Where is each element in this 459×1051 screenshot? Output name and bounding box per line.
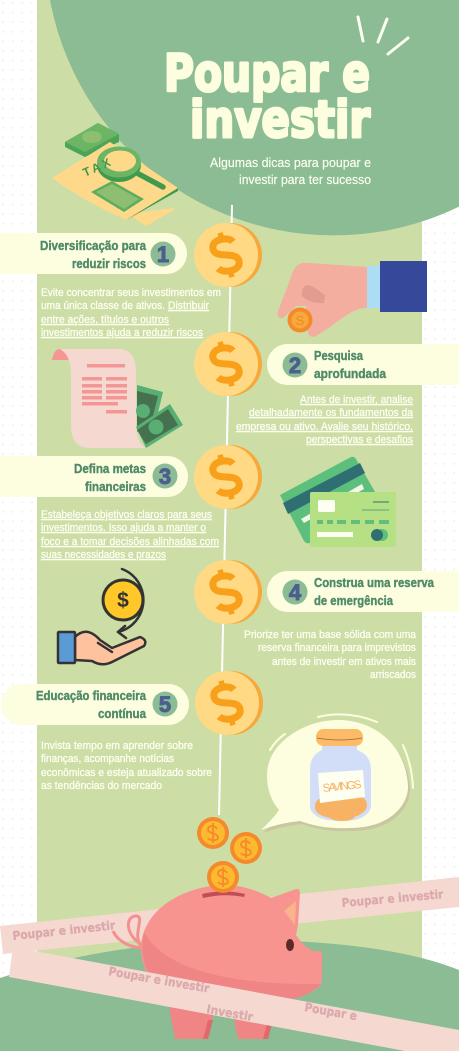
heading 2 xyxy=(314,348,387,381)
text 1: Distribuir xyxy=(168,300,209,312)
text 4: arriscados xyxy=(370,669,416,681)
text 2: perspectivas e desafios xyxy=(306,434,413,446)
number 2 xyxy=(282,352,308,378)
text 4: antes de investir em ativos mais xyxy=(272,656,416,668)
heading 3: financeiras xyxy=(85,479,146,494)
number 1: 1 xyxy=(157,242,169,267)
speech bubble with savings jar: SAVINGS xyxy=(322,779,362,795)
pill 3 xyxy=(0,456,188,497)
number 1 xyxy=(150,242,176,267)
pill 4 xyxy=(267,571,459,612)
step 2 xyxy=(194,332,459,446)
text 2 xyxy=(236,394,414,446)
coin 2 xyxy=(194,332,262,396)
subtitle xyxy=(210,156,371,187)
icon: hand receiving coin: $ xyxy=(117,589,129,612)
text 4: Priorize ter uma base sólida com uma xyxy=(244,629,417,641)
subtitle: investir para ter sucesso xyxy=(239,173,371,187)
number 5 xyxy=(152,692,178,717)
icon: hand receiving coin xyxy=(58,569,145,664)
green central panel xyxy=(37,0,422,1000)
text 1: entre ações, títulos e outros xyxy=(41,314,169,326)
icon: tax document with magnifier xyxy=(52,123,178,226)
coin 1 xyxy=(194,223,262,287)
coin 3 xyxy=(194,445,262,509)
step 4 xyxy=(194,560,459,681)
icon: credit cards xyxy=(280,457,396,547)
heading 2: Pesquisa xyxy=(314,348,364,363)
heading 4 xyxy=(314,575,435,608)
sparkle strokes xyxy=(358,17,408,54)
text 5: finanças, acompanhe notícias xyxy=(41,753,174,765)
text 4 xyxy=(244,629,417,681)
timeline line xyxy=(219,205,232,815)
heading 5: Educação financeira xyxy=(36,688,147,703)
icon: receipt scroll and money xyxy=(52,349,183,448)
number 5: 5 xyxy=(159,692,171,717)
heading 2: aprofundada xyxy=(314,366,387,381)
number 3 xyxy=(152,464,178,489)
number 3: 3 xyxy=(159,464,171,489)
subtitle: Algumas dicas para poupar e xyxy=(210,156,371,170)
title: Poupar e xyxy=(164,45,370,104)
coin 5 xyxy=(195,671,263,735)
icon: tax document with magnifier: TAX xyxy=(81,155,113,180)
coin entering piggy bank xyxy=(207,861,239,893)
icon: hand holding coin xyxy=(278,261,427,337)
heading 4: Construa uma reserva xyxy=(314,575,435,590)
ribbon: bottom xyxy=(9,947,459,1051)
text 5: econômicas e esteja atualizado sobre xyxy=(41,767,212,779)
step 5 xyxy=(1,671,263,792)
ribbon text: bottom 2: Investir xyxy=(205,1002,254,1024)
text 3 xyxy=(41,509,219,561)
number 2: 2 xyxy=(289,353,301,378)
text 5: as tendências do mercado xyxy=(41,780,162,792)
text 1 xyxy=(41,287,221,339)
heading 3 xyxy=(74,461,146,494)
header circle xyxy=(45,0,459,235)
ribbon: top xyxy=(0,877,459,954)
pill 5 xyxy=(1,684,189,725)
text 3: investimentos. Isso ajuda a manter o xyxy=(41,522,206,534)
pill 1 xyxy=(0,233,187,274)
text 3: foco e a tomar decisões alinhadas com xyxy=(41,536,219,548)
text 5 xyxy=(41,740,212,792)
pill 2 xyxy=(267,344,459,385)
text 2: Antes de investir, analise xyxy=(300,394,413,406)
text 4: reserva financeira para imprevistos xyxy=(258,642,416,654)
heading 1: reduzir riscos xyxy=(72,256,146,271)
text 5: Invista tempo em aprender sobre xyxy=(41,740,193,752)
heading 5: contínua xyxy=(98,706,147,721)
ribbon text: bottom 3: Poupar e xyxy=(303,1000,358,1023)
text 1: investimentos ajuda a reduzir riscos xyxy=(41,327,203,339)
ribbon text: top right: Poupar e investir xyxy=(341,887,444,910)
piggy bank xyxy=(113,885,322,1039)
ribbon text: bottom 1: Poupar e investir xyxy=(107,964,210,996)
step 3 xyxy=(0,445,262,561)
ribbon text: top left: Poupar e investir xyxy=(12,918,116,943)
number 4: 4 xyxy=(289,580,302,605)
heading 1 xyxy=(40,238,147,271)
text 1: uma única classe de ativos. xyxy=(41,300,165,312)
speech bubble with savings jar xyxy=(261,714,413,833)
text 1: Evite concentrar seus investimentos em xyxy=(41,287,221,299)
icon: hand holding coin: S xyxy=(296,313,305,328)
heading 3: Defina metas xyxy=(74,461,146,476)
text 2: empresa ou ativo. Avalie seu histórico, xyxy=(236,421,413,433)
falling coins xyxy=(197,817,262,864)
text 3: Estabeleça objetivos claros para seus xyxy=(41,509,212,521)
heading 1: Diversificação para xyxy=(40,238,147,253)
text 2: detalhadamente os fundamentos da xyxy=(249,407,414,419)
bottom green hill xyxy=(0,940,459,1051)
heading 5 xyxy=(36,688,147,721)
step 1 xyxy=(0,223,262,339)
heading 4: de emergência xyxy=(314,593,394,608)
title: investir xyxy=(190,91,370,150)
text 3: suas necessidades e prazos xyxy=(41,549,166,561)
title xyxy=(164,45,370,150)
number 4 xyxy=(282,580,308,605)
coin 4 xyxy=(194,560,262,624)
